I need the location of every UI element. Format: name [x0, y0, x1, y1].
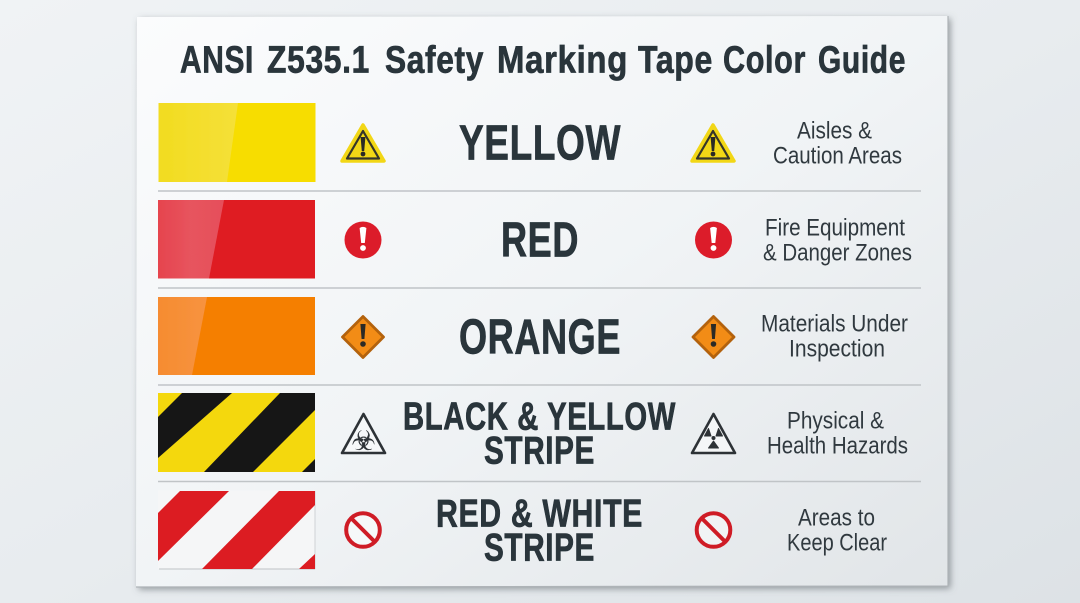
icon: orange warning diamond — [342, 316, 384, 358]
title: Z535.1 — [267, 40, 370, 82]
row: red — [158, 200, 912, 278]
label: black and yellow stripe: STRIPE — [484, 430, 595, 472]
title: Guide — [818, 40, 906, 82]
description: fire equipment and danger zones: Fire Equipment — [765, 214, 905, 242]
title: Marking — [497, 40, 628, 82]
title: ANSI — [180, 40, 254, 82]
label: orange: ORANGE — [459, 310, 621, 364]
label: red and white stripe: STRIPE — [484, 526, 595, 570]
description: fire equipment and danger zones: & Danger Zones — [763, 240, 912, 266]
tape: red and white stripes — [158, 490, 315, 569]
title: Tape — [638, 40, 713, 82]
icon: radiation triangle — [692, 414, 735, 453]
icon: prohibition sign right — [697, 513, 730, 547]
icon: biohazard triangle — [342, 414, 385, 457]
description: areas to keep clear: Areas to — [798, 504, 875, 532]
description: materials under inspection: Inspection — [789, 336, 885, 362]
label: red and white stripe: RED & WHITE — [436, 492, 643, 536]
tape: orange swatch — [158, 297, 315, 375]
title: Safety — [385, 40, 484, 82]
title — [180, 40, 906, 82]
label: red and white stripe — [436, 492, 643, 570]
icon: red exclamation circle — [344, 222, 382, 258]
description: aisles and caution areas: Aisles & — [797, 118, 872, 144]
description: aisles and caution areas — [773, 118, 902, 170]
icon: prohibition sign — [346, 513, 380, 547]
icon: yellow warning triangle — [342, 125, 384, 161]
description: materials under inspection — [761, 310, 908, 362]
icon: yellow warning triangle right — [692, 125, 734, 161]
description: aisles and caution areas: Caution Areas — [773, 142, 902, 170]
description: fire equipment and danger zones — [763, 214, 912, 266]
tape: red swatch — [158, 200, 315, 278]
label: red: RED — [501, 214, 579, 268]
description: materials under inspection: Materials Under — [761, 310, 908, 338]
row: orange — [158, 297, 908, 375]
icon: red exclamation circle right — [695, 222, 732, 258]
tape: yellow swatch — [158, 103, 316, 182]
description: physical and health hazards: Physical & — [787, 408, 884, 434]
panel: guide board — [136, 16, 948, 587]
description: physical and health hazards: Health Hazards — [767, 432, 908, 460]
label: black and yellow stripe: BLACK & YELLOW — [403, 396, 676, 438]
description: areas to keep clear — [787, 504, 887, 556]
tape: black and yellow stripes — [158, 393, 315, 472]
row: red and white stripe — [158, 490, 887, 570]
title: Color — [723, 40, 806, 82]
icon: orange warning diamond right — [693, 316, 734, 358]
row: yellow — [158, 103, 902, 182]
description: areas to keep clear: Keep Clear — [787, 530, 887, 556]
description: physical and health hazards — [767, 408, 908, 460]
row: black and yellow stripe — [158, 393, 908, 472]
icon: biohazard triangle: ☣ — [351, 426, 376, 457]
label: black and yellow stripe — [403, 396, 676, 472]
label: yellow: YELLOW — [459, 116, 621, 170]
